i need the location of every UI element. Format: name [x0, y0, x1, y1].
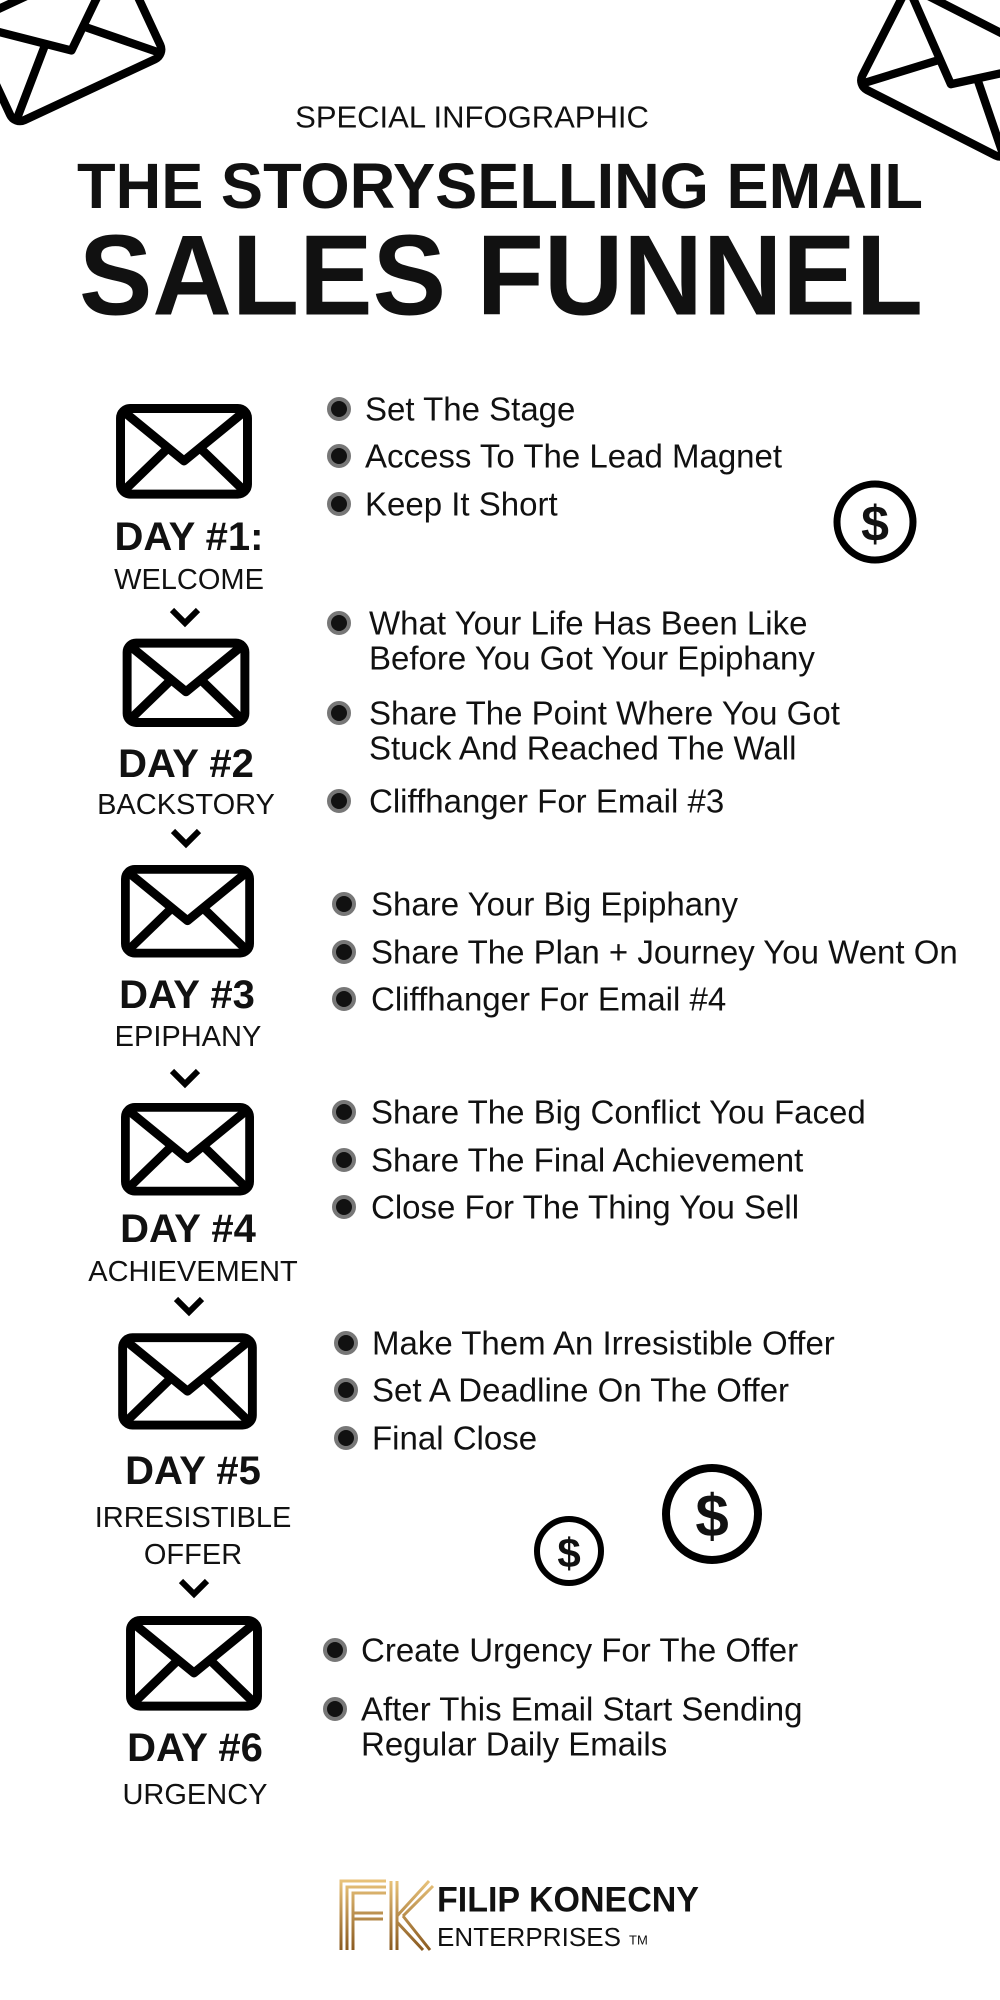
text: day 2 points: What Your Life Has Been Like [369, 604, 807, 642]
text: day 4 points: Close For The Thing You Sell [371, 1188, 799, 1226]
text: day 5 points: Set A Deadline On The Offer [372, 1372, 789, 1408]
title [77, 150, 923, 340]
step: day 4 [88, 1107, 298, 1288]
step: day 1: WELCOME [114, 564, 264, 596]
arrow [181, 1581, 207, 1594]
step: day 6 [122, 1621, 268, 1811]
text: day 2 points: Stuck And Reached The Wall [369, 730, 796, 766]
step: day 4: DAY #4 [120, 1207, 257, 1251]
text: day 5 points: Final Close [372, 1420, 537, 1456]
arrow [173, 831, 199, 844]
text: day 5 points [372, 1324, 835, 1456]
title: THE STORYSELLING EMAIL [77, 150, 923, 222]
icon: dollar 2 [666, 1468, 758, 1560]
logo [341, 1880, 699, 1952]
bullets [325, 399, 356, 1719]
text: day 2 points: Share The Point Where You Got [369, 694, 840, 732]
text: day 2 points [369, 604, 840, 820]
icon: dollar 1 [837, 484, 913, 560]
icon: corner envelope top-left [0, 0, 165, 125]
text: day 6 points: Regular Daily Emails [361, 1726, 667, 1762]
step: day 1 [114, 409, 264, 596]
text: day 1 points: Access To The Lead Magnet [365, 438, 782, 474]
text: day 1 points [365, 390, 782, 522]
icon: dollar 3 [537, 1519, 601, 1583]
text: day 6 points: Create Urgency For The Offer [361, 1632, 798, 1668]
text: day 3 points: Share The Plan + Journey You Went On [371, 934, 958, 970]
logo: FILIP KONECNY [437, 1880, 699, 1920]
text: day 4 points: Share The Final Achievement [371, 1142, 803, 1178]
step: day 5 [95, 1338, 291, 1571]
step: day 2 [97, 643, 275, 821]
text: day 1 points: Set The Stage [365, 390, 575, 428]
step: day 6: DAY #6 [127, 1726, 263, 1770]
text: day 3 points: Share Your Big Epiphany [371, 886, 738, 922]
text: day 3 points [371, 886, 958, 1018]
logo: TM [629, 1932, 648, 1948]
text: day 2 points: Cliffhanger For Email #3 [369, 782, 724, 820]
step: day 5: OFFER [144, 1539, 242, 1571]
step: day 1: DAY #1: [115, 515, 263, 559]
icon: corner envelope top-right [857, 0, 1000, 160]
step: day 3 [115, 869, 261, 1053]
step: day 3: EPIPHANY [115, 1021, 261, 1053]
step: day 2: BACKSTORY [97, 789, 275, 821]
step: day 4: ACHIEVEMENT [88, 1256, 298, 1288]
logo: ENTERPRISES [437, 1922, 621, 1952]
text: day 6 points: After This Email Start Sending [361, 1690, 802, 1728]
text: day 4 points: Share The Big Conflict You Faced [371, 1094, 866, 1130]
icon: dollar 1: $ [861, 496, 889, 552]
arrow [176, 1299, 202, 1312]
text: day 3 points: Cliffhanger For Email #4 [371, 980, 726, 1018]
arrow [172, 610, 198, 623]
step: day 6: URGENCY [122, 1779, 268, 1811]
text: day 1 points: Keep It Short [365, 486, 558, 522]
icon: dollar 3: $ [557, 1530, 581, 1576]
icon: envelope day 1 [121, 409, 247, 494]
icon: dollar 2: $ [695, 1482, 729, 1550]
step: day 5: IRRESISTIBLE [95, 1502, 291, 1534]
text: day 5 points: Make Them An Irresistible Offer [372, 1324, 835, 1362]
text: day 4 points [371, 1094, 866, 1226]
text: day 2 points: Before You Got Your Epiphany [369, 640, 815, 676]
step: day 5: DAY #5 [125, 1449, 261, 1493]
subtitle: SPECIAL INFOGRAPHIC [295, 100, 649, 134]
step: day 2: DAY #2 [118, 742, 254, 786]
step: day 3: DAY #3 [119, 973, 255, 1017]
title: SALES FUNNEL [79, 212, 923, 340]
text: day 6 points [361, 1632, 802, 1762]
logo mark FK [341, 1881, 433, 1950]
arrow [172, 1071, 198, 1084]
